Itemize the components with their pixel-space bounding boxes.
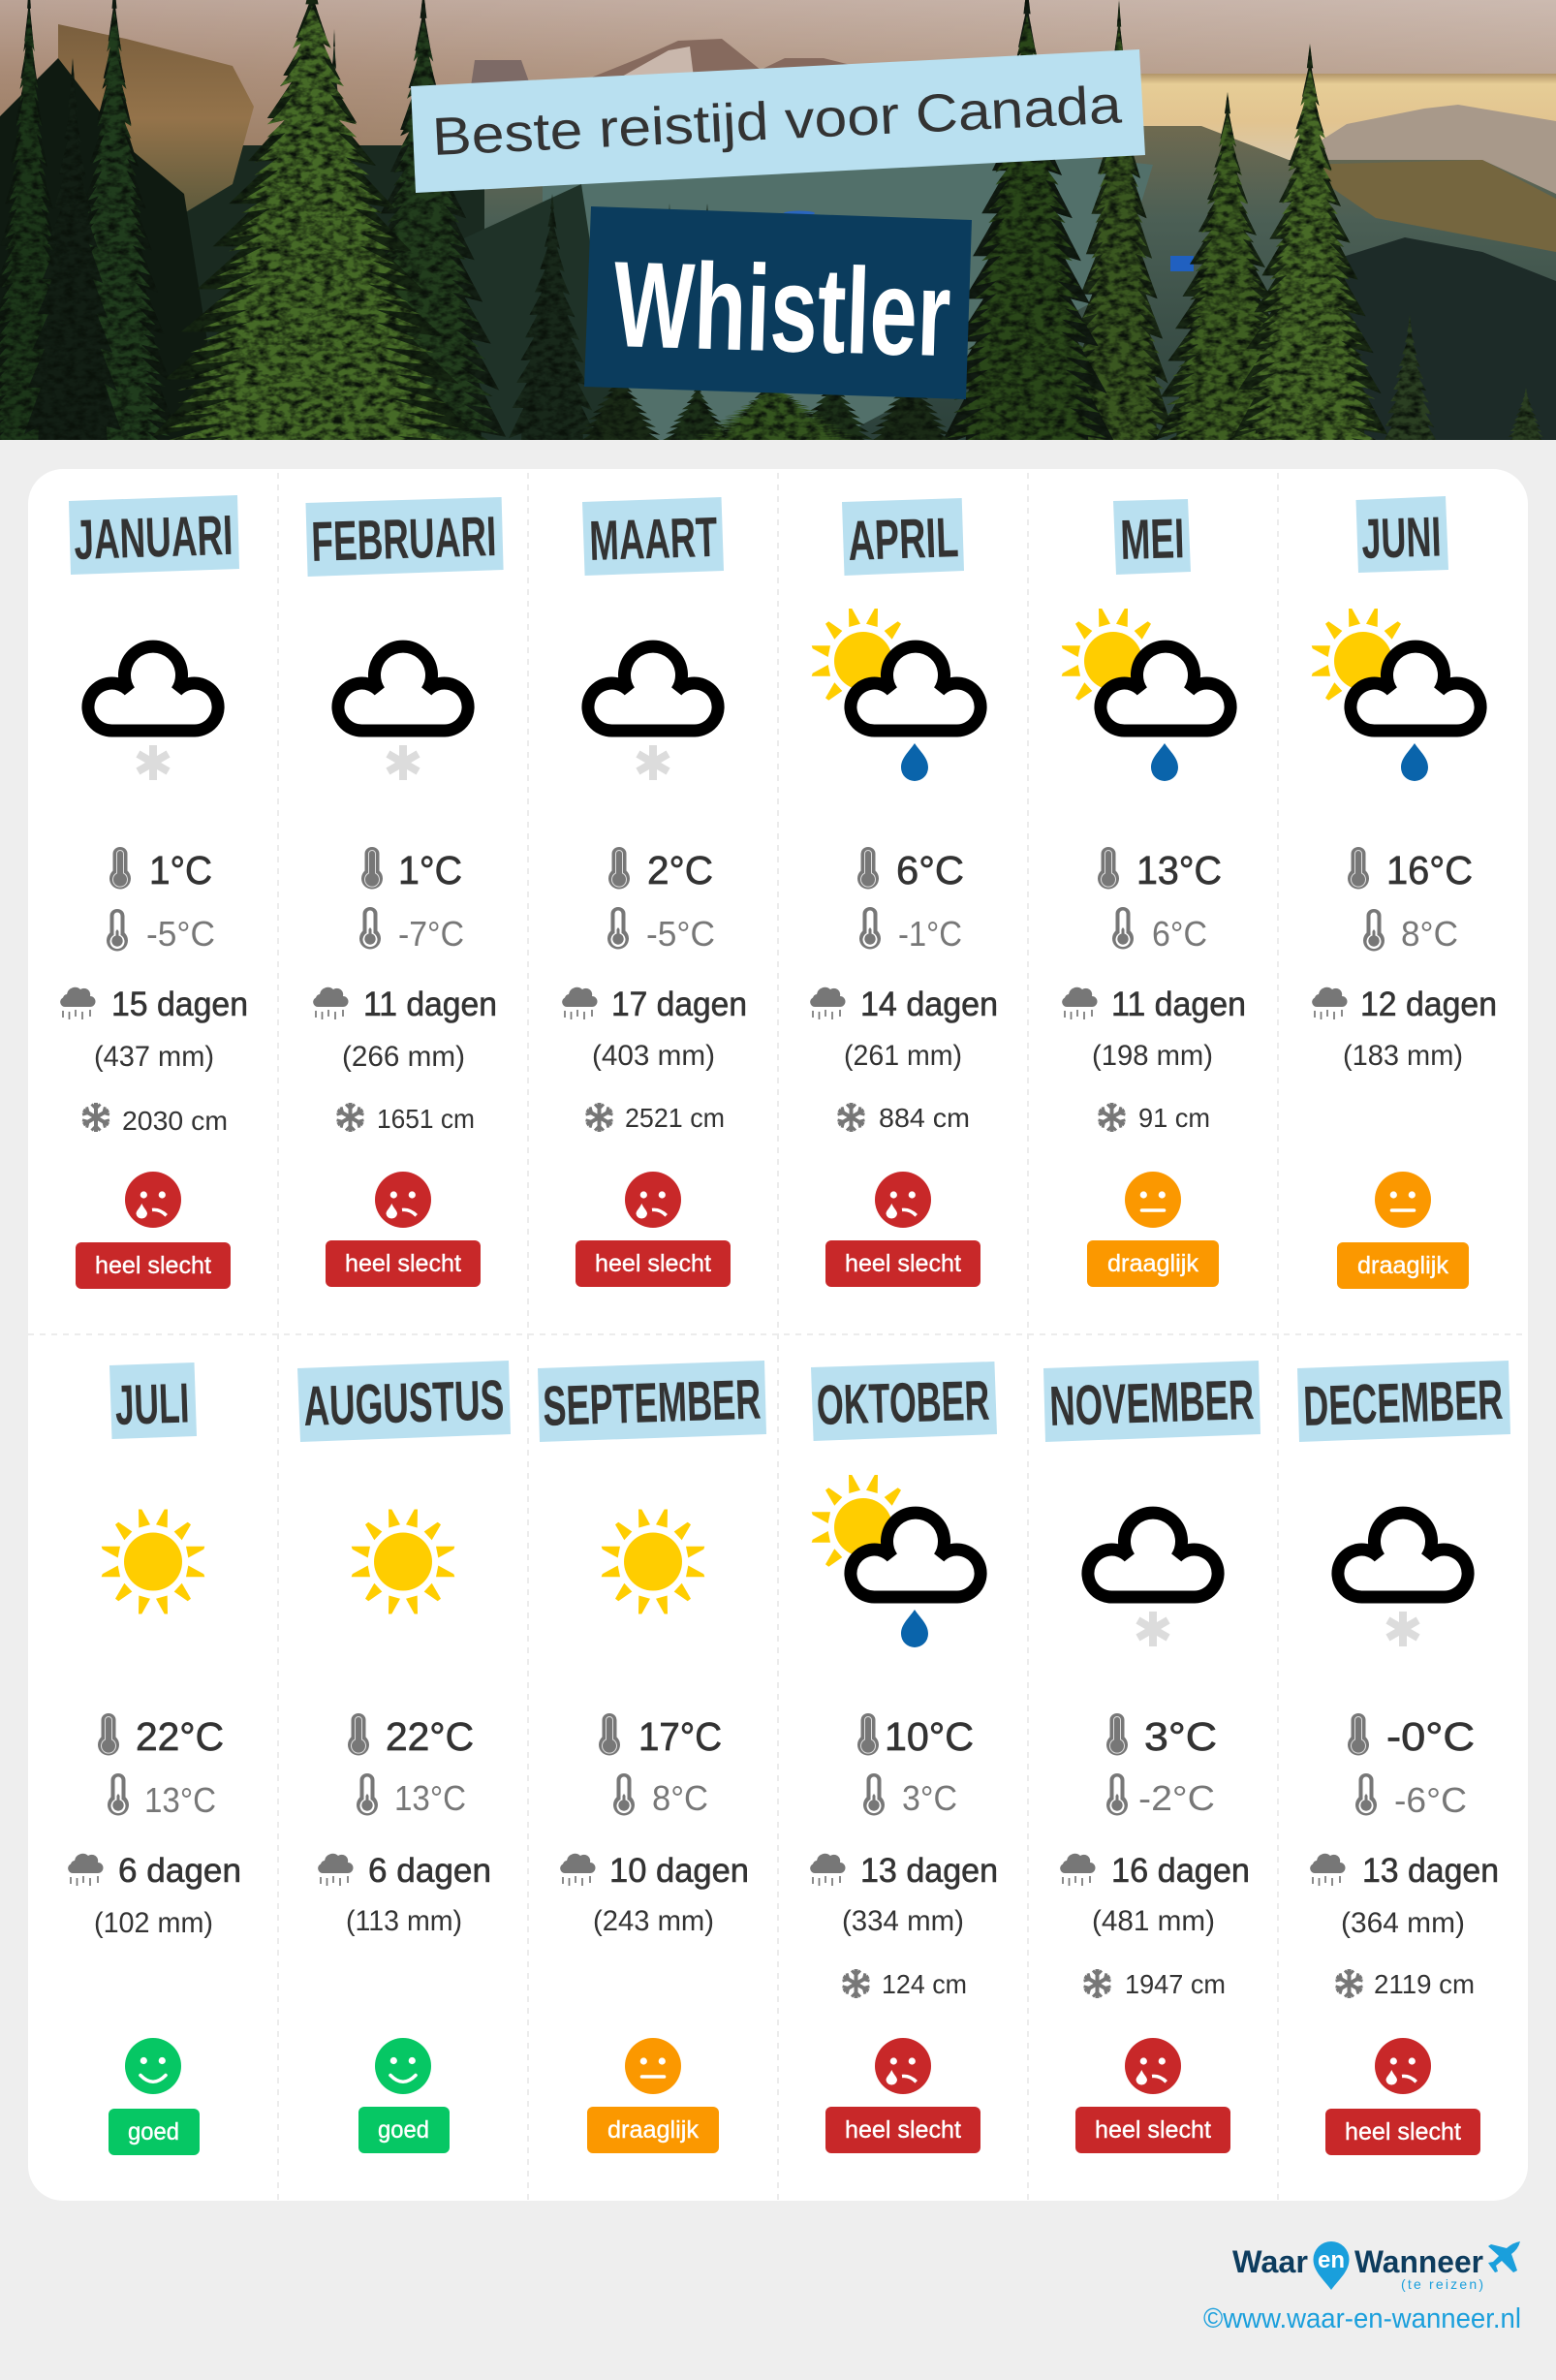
icon: rain xyxy=(1060,1854,1095,1886)
rainfall: (261 mm) xyxy=(844,1040,962,1072)
icon: thermometer high xyxy=(1106,1713,1128,1756)
panel: oktober xyxy=(810,1362,998,2153)
rating badge: draaglijk xyxy=(607,2116,699,2144)
max temperature: 1°C xyxy=(398,848,462,892)
icon: sun xyxy=(352,1510,454,1614)
icon: thermometer high xyxy=(857,847,879,890)
month heading xyxy=(811,1362,997,1441)
icon: sad face xyxy=(875,2038,931,2094)
icon: sad face xyxy=(875,1172,931,1228)
min temperature: -7°C xyxy=(398,914,464,954)
panel: april xyxy=(810,498,998,1287)
month heading xyxy=(842,498,964,576)
panel: januari xyxy=(60,495,248,1289)
rating badge: draaglijk xyxy=(1357,1252,1448,1279)
month heading: JULI xyxy=(114,1371,190,1437)
month heading: FEBRUARI xyxy=(310,505,497,574)
rating badge xyxy=(326,1240,481,1287)
min temperature: 6°C xyxy=(1152,914,1207,954)
min temperature: 8°C xyxy=(652,1778,708,1818)
rainfall: (481 mm) xyxy=(1092,1905,1215,1937)
min temperature: 8°C xyxy=(1401,914,1458,954)
month heading xyxy=(306,497,504,577)
icon: snowflake xyxy=(584,1103,614,1132)
icon: thermometer low xyxy=(359,907,381,950)
panel: juli xyxy=(68,1362,241,2155)
icon: sad face xyxy=(125,1172,181,1228)
icon: thermometer low xyxy=(607,907,629,950)
icon: rain xyxy=(810,987,845,1019)
rating badge xyxy=(825,2107,980,2153)
rain days: 15 dagen xyxy=(111,986,248,1023)
icon: thermometer low xyxy=(1106,1773,1128,1816)
icon: snowflake xyxy=(81,1103,110,1132)
icon: rain xyxy=(60,987,95,1019)
icon: thermometer high xyxy=(348,1713,369,1756)
rain days: 6 dagen xyxy=(118,1852,241,1890)
icon: rain xyxy=(560,1854,595,1886)
max temperature: 1°C xyxy=(149,848,212,892)
panel: maart xyxy=(562,497,747,1287)
min temperature: -6°C xyxy=(1394,1780,1467,1820)
rain days: 17 dagen xyxy=(611,986,747,1023)
icon: rain xyxy=(810,1854,845,1886)
icon: neutral face xyxy=(1375,1172,1431,1228)
rainfall: (183 mm) xyxy=(1343,1040,1463,1072)
icon: map pin xyxy=(1314,2241,1349,2290)
icon: rain xyxy=(1312,987,1347,1019)
logo: Waar en Wanneer: (te reizen) xyxy=(1401,2276,1483,2292)
logo: Waar en Wanneer: Waar xyxy=(1232,2244,1308,2279)
panel: mei xyxy=(1062,499,1246,1287)
panel: juni xyxy=(1312,496,1497,1289)
icon: snowflake xyxy=(335,1103,365,1132)
icon: thermometer low xyxy=(859,907,881,950)
panel: september xyxy=(538,1361,766,2153)
icon: rain xyxy=(562,987,597,1019)
rain days: 12 dagen xyxy=(1360,986,1497,1023)
month heading xyxy=(1043,1361,1260,1442)
rain days: 11 dagen xyxy=(363,986,497,1023)
max temperature: 22°C xyxy=(136,1714,224,1759)
rain days: 14 dagen xyxy=(860,986,998,1023)
month heading xyxy=(69,495,239,575)
min temperature: -1°C xyxy=(898,914,962,954)
min temperature: 13°C xyxy=(144,1780,216,1820)
month heading xyxy=(109,1362,197,1439)
month heading: JUNI xyxy=(1360,505,1442,571)
icon: map pin: en xyxy=(1318,2247,1345,2273)
snowfall: 1651 cm xyxy=(377,1104,475,1134)
rating badge xyxy=(576,1240,731,1287)
icon: thermometer high xyxy=(1098,847,1119,890)
icon: thermometer high xyxy=(608,847,630,890)
rain days: 10 dagen xyxy=(609,1852,749,1890)
rating badge xyxy=(76,1242,231,1289)
icon: thermometer low xyxy=(613,1773,635,1816)
icon: thermometer high xyxy=(1348,847,1369,890)
icon: rain xyxy=(318,1854,353,1886)
max temperature: -0°C xyxy=(1386,1714,1475,1759)
icon: rain xyxy=(313,987,349,1019)
logo: Waar en Wanneer: Wanneer xyxy=(1354,2244,1483,2279)
snowfall: 1947 cm xyxy=(1125,1969,1226,1999)
icon: thermometer low xyxy=(863,1773,885,1816)
icon: thermometer high xyxy=(98,1713,119,1756)
snowfall: 91 cm xyxy=(1138,1103,1210,1133)
rating badge: heel slecht xyxy=(1095,2116,1211,2144)
icon: sun xyxy=(602,1510,704,1614)
icon: rain xyxy=(1310,1854,1345,1886)
icon: thermometer low xyxy=(1355,1773,1377,1816)
rainfall: (364 mm) xyxy=(1341,1907,1465,1939)
icon: rain xyxy=(1062,987,1097,1019)
rating badge xyxy=(825,1240,980,1287)
month heading xyxy=(1113,499,1191,575)
month heading xyxy=(582,497,724,576)
icon: cloud with snow xyxy=(1338,1513,1468,1646)
icon: cloud with snow xyxy=(88,646,218,780)
max temperature: 6°C xyxy=(896,848,964,892)
icon: sun, cloud and rain xyxy=(812,609,980,781)
month heading: MAART xyxy=(588,506,718,573)
rainfall: (437 mm) xyxy=(94,1041,214,1073)
snowfall: 2521 cm xyxy=(625,1103,725,1133)
icon: snowflake xyxy=(1097,1103,1127,1132)
icon: thermometer low xyxy=(107,909,128,952)
rating badge: goed xyxy=(378,2116,429,2144)
rating badge: heel slecht xyxy=(595,1250,711,1277)
title ribbon xyxy=(411,49,1145,193)
icon: thermometer low xyxy=(1363,909,1385,952)
snowfall: 124 cm xyxy=(882,1969,967,1999)
rating badge xyxy=(358,2107,450,2153)
icon: thermometer low xyxy=(1112,907,1134,950)
max temperature: 3°C xyxy=(1144,1714,1217,1759)
rain days: 13 dagen xyxy=(1362,1852,1499,1890)
icon: thermometer low xyxy=(108,1773,129,1816)
icon: thermometer high xyxy=(599,1713,620,1756)
month heading xyxy=(297,1361,511,1442)
snowfall: 2030 cm xyxy=(122,1106,228,1136)
max temperature: 22°C xyxy=(386,1714,474,1759)
month heading: JANUARI xyxy=(73,504,233,572)
month heading: NOVEMBER xyxy=(1048,1368,1255,1438)
rating badge xyxy=(109,2109,200,2155)
snowfall: 2119 cm xyxy=(1374,1969,1475,1999)
icon: sad face xyxy=(625,1172,681,1228)
rainfall: (403 mm) xyxy=(592,1040,715,1072)
icon: cloud with snow xyxy=(1088,1513,1218,1646)
icon: neutral face xyxy=(625,2038,681,2094)
icon: neutral face xyxy=(1125,1172,1181,1228)
panel: climate table card xyxy=(28,469,1528,2201)
month heading: SEPTEMBER xyxy=(542,1368,762,1438)
rainfall: (113 mm) xyxy=(346,1905,462,1937)
panel: februari xyxy=(306,497,504,1287)
min temperature: -5°C xyxy=(146,914,215,954)
max temperature: 13°C xyxy=(1136,848,1222,892)
destination box xyxy=(584,206,972,399)
rating badge: goed xyxy=(128,2118,179,2145)
month heading: APRIL xyxy=(847,506,959,573)
icon: sun, cloud and rain xyxy=(812,1475,980,1647)
rainfall: (243 mm) xyxy=(593,1905,714,1937)
hero photo: forest and mountains xyxy=(0,0,1556,465)
max temperature: 2°C xyxy=(647,848,713,892)
rating badge xyxy=(587,2107,719,2153)
rating badge: heel slecht xyxy=(95,1252,211,1279)
rainfall: (266 mm) xyxy=(342,1041,465,1073)
icon: sad face xyxy=(1375,2038,1431,2094)
title text: Beste reistijd voor Canada xyxy=(431,74,1123,167)
icon: thermometer high xyxy=(361,847,383,890)
rating badge xyxy=(1087,1240,1219,1287)
icon: snowflake xyxy=(841,1969,871,1998)
rainfall: (102 mm) xyxy=(94,1907,213,1939)
month heading xyxy=(1356,496,1448,573)
rating badge: heel slecht xyxy=(1345,2118,1461,2145)
destination name: Whistler xyxy=(611,235,952,382)
rating badge: heel slecht xyxy=(845,2116,961,2144)
icon: thermometer high xyxy=(109,847,131,890)
logo: Waar en Wanneer xyxy=(1232,2241,1520,2292)
panel: november xyxy=(1043,1361,1260,2153)
icon: thermometer high xyxy=(857,1713,879,1756)
icon: cloud with snow xyxy=(588,646,718,780)
min temperature: 13°C xyxy=(394,1778,466,1818)
icon: sun, cloud and rain xyxy=(1062,609,1230,781)
icon: happy face xyxy=(375,2038,431,2094)
month heading: MEI xyxy=(1120,507,1185,572)
icon: rain xyxy=(68,1854,103,1886)
panel: december xyxy=(1297,1361,1510,2155)
icon: thermometer high xyxy=(1348,1713,1369,1756)
rain days: 6 dagen xyxy=(368,1852,491,1890)
rating badge: heel slecht xyxy=(845,1250,961,1277)
min temperature: -2°C xyxy=(1138,1778,1215,1818)
icon: snowflake xyxy=(1334,1969,1364,1998)
icon: sun, cloud and rain xyxy=(1312,609,1480,781)
rating badge xyxy=(1325,2109,1480,2155)
panel: augustus xyxy=(297,1361,511,2153)
min temperature: 3°C xyxy=(902,1778,957,1818)
icon: sun xyxy=(102,1510,204,1614)
icon: snowflake xyxy=(836,1103,866,1132)
icon: snowflake xyxy=(1082,1969,1112,1998)
max temperature: 16°C xyxy=(1386,848,1473,892)
icon: sad face xyxy=(375,1172,431,1228)
month heading: AUGUSTUS xyxy=(302,1368,505,1438)
icon: cloud with snow xyxy=(338,646,468,780)
icon: thermometer low xyxy=(357,1773,378,1816)
rainfall: (198 mm) xyxy=(1092,1040,1213,1072)
rating badge: draaglijk xyxy=(1107,1250,1198,1277)
rainfall: (334 mm) xyxy=(842,1905,964,1937)
month heading xyxy=(538,1361,766,1442)
max temperature: 10°C xyxy=(885,1714,974,1759)
icon: happy face xyxy=(125,2038,181,2094)
rain days: 11 dagen xyxy=(1111,986,1246,1023)
rain days: 13 dagen xyxy=(860,1852,998,1890)
rating badge xyxy=(1075,2107,1230,2153)
icon: sad face xyxy=(1125,2038,1181,2094)
max temperature: 17°C xyxy=(638,1714,722,1759)
rating badge: heel slecht xyxy=(345,1250,461,1277)
snowfall: 884 cm xyxy=(879,1103,970,1133)
rating badge xyxy=(1337,1242,1469,1289)
rain days: 16 dagen xyxy=(1111,1852,1250,1890)
icon: plane xyxy=(1488,2241,1520,2272)
min temperature: -5°C xyxy=(646,914,715,954)
website credit: ©www.waar-en-wanneer.nl xyxy=(1203,2303,1521,2334)
month heading: OKTOBER xyxy=(816,1369,990,1437)
